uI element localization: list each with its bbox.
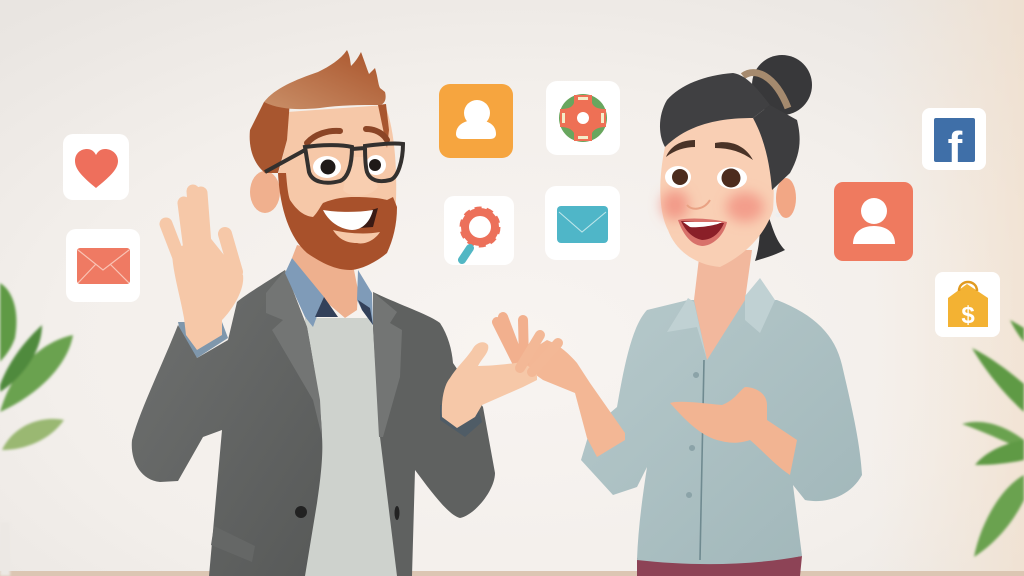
man: glasses (265, 144, 403, 183)
man: raised hand (166, 191, 243, 350)
icon: heart (63, 134, 129, 200)
icon: orange profile (439, 84, 513, 158)
icon: shop dollar: $ (961, 302, 975, 329)
icon: facebook: f (948, 123, 963, 172)
man: nose (343, 157, 378, 196)
woman: blush (661, 190, 764, 222)
woman: ponytail back (755, 215, 785, 261)
woman: lips (678, 219, 727, 246)
man: pocket (211, 526, 255, 562)
man: shirt collar (285, 258, 373, 327)
woman: forearm and hand at center (515, 340, 625, 457)
man: beard (278, 173, 397, 270)
man: shirt cuff (178, 322, 228, 358)
man: sweater (302, 318, 397, 576)
man: chin skin (333, 230, 380, 243)
plant: left (0, 283, 73, 576)
man: neck (292, 245, 358, 318)
man: side hair (250, 100, 290, 173)
woman: ear (776, 178, 796, 218)
man: buttons (295, 506, 400, 520)
woman: eyes (665, 166, 747, 189)
woman: collar (667, 278, 775, 360)
man: eyebrows (307, 129, 387, 143)
man: blazer left (132, 270, 322, 576)
woman: teeth (683, 222, 722, 227)
woman: fingers at center (497, 317, 524, 362)
woman: mouth (681, 221, 724, 240)
woman: eyebrows (666, 140, 753, 160)
icon: green and red wheel (546, 81, 620, 155)
woman: hair tie (743, 73, 788, 108)
woman: bun (752, 55, 812, 115)
icon: red envelope (66, 229, 140, 302)
man: blazer right (373, 292, 495, 576)
woman: open hand and forearm (670, 387, 797, 475)
icon: coral profile (834, 182, 913, 261)
man (132, 50, 558, 576)
man: teeth (323, 210, 373, 230)
man: right hair sliver (378, 104, 389, 148)
man: ear (250, 171, 280, 213)
icon: facebook (922, 108, 986, 172)
woman: neck (694, 250, 752, 360)
man: eyes (313, 155, 386, 178)
icon: gear magnifier (444, 196, 514, 265)
woman: hair top (660, 73, 770, 147)
woman: side hair (753, 105, 800, 190)
man: face (278, 105, 396, 268)
icon: teal envelope (545, 186, 620, 260)
woman: earring (776, 212, 780, 218)
woman: placket (700, 360, 704, 560)
woman: buttons (689, 375, 696, 495)
man: right hand (442, 335, 558, 428)
man: lapels (266, 270, 402, 437)
woman: nose (687, 200, 710, 209)
plant: right (962, 320, 1024, 557)
man: right cuff inner (440, 405, 482, 437)
man: mouth dark (360, 208, 378, 228)
man: collar inner (315, 297, 373, 325)
woman (497, 55, 862, 576)
woman: trousers (637, 556, 802, 576)
woman: shirt (581, 300, 862, 564)
icon: shop dollar (935, 272, 1000, 337)
man: hair top (264, 50, 386, 109)
woman: face (660, 117, 774, 267)
